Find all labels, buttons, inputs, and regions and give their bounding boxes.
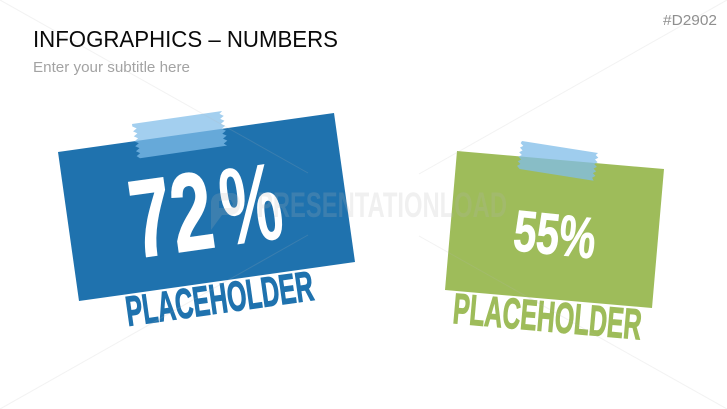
icon: blue note tape [132, 111, 228, 159]
72 percent value: 72 [122, 149, 221, 282]
panel: green 55 percent note [445, 141, 664, 349]
icon: green note tape [517, 141, 599, 181]
watermark text: PRESENTATIONLOAD [257, 186, 507, 225]
watermark [211, 186, 507, 230]
icon: watermark logo [211, 193, 240, 230]
product code: #D2902 [663, 12, 717, 29]
panel: blue 72 percent note [58, 111, 355, 335]
subtitle: Enter your subtitle here [33, 60, 190, 76]
title: INFOGRAPHICS – NUMBERS [33, 26, 338, 52]
blue note rectangle [58, 113, 355, 301]
55 percent value: 55% [511, 198, 599, 272]
green note rectangle [445, 151, 664, 308]
72 percent value: % [212, 139, 290, 270]
blue placeholder label: PLACEHOLDER [123, 262, 316, 335]
